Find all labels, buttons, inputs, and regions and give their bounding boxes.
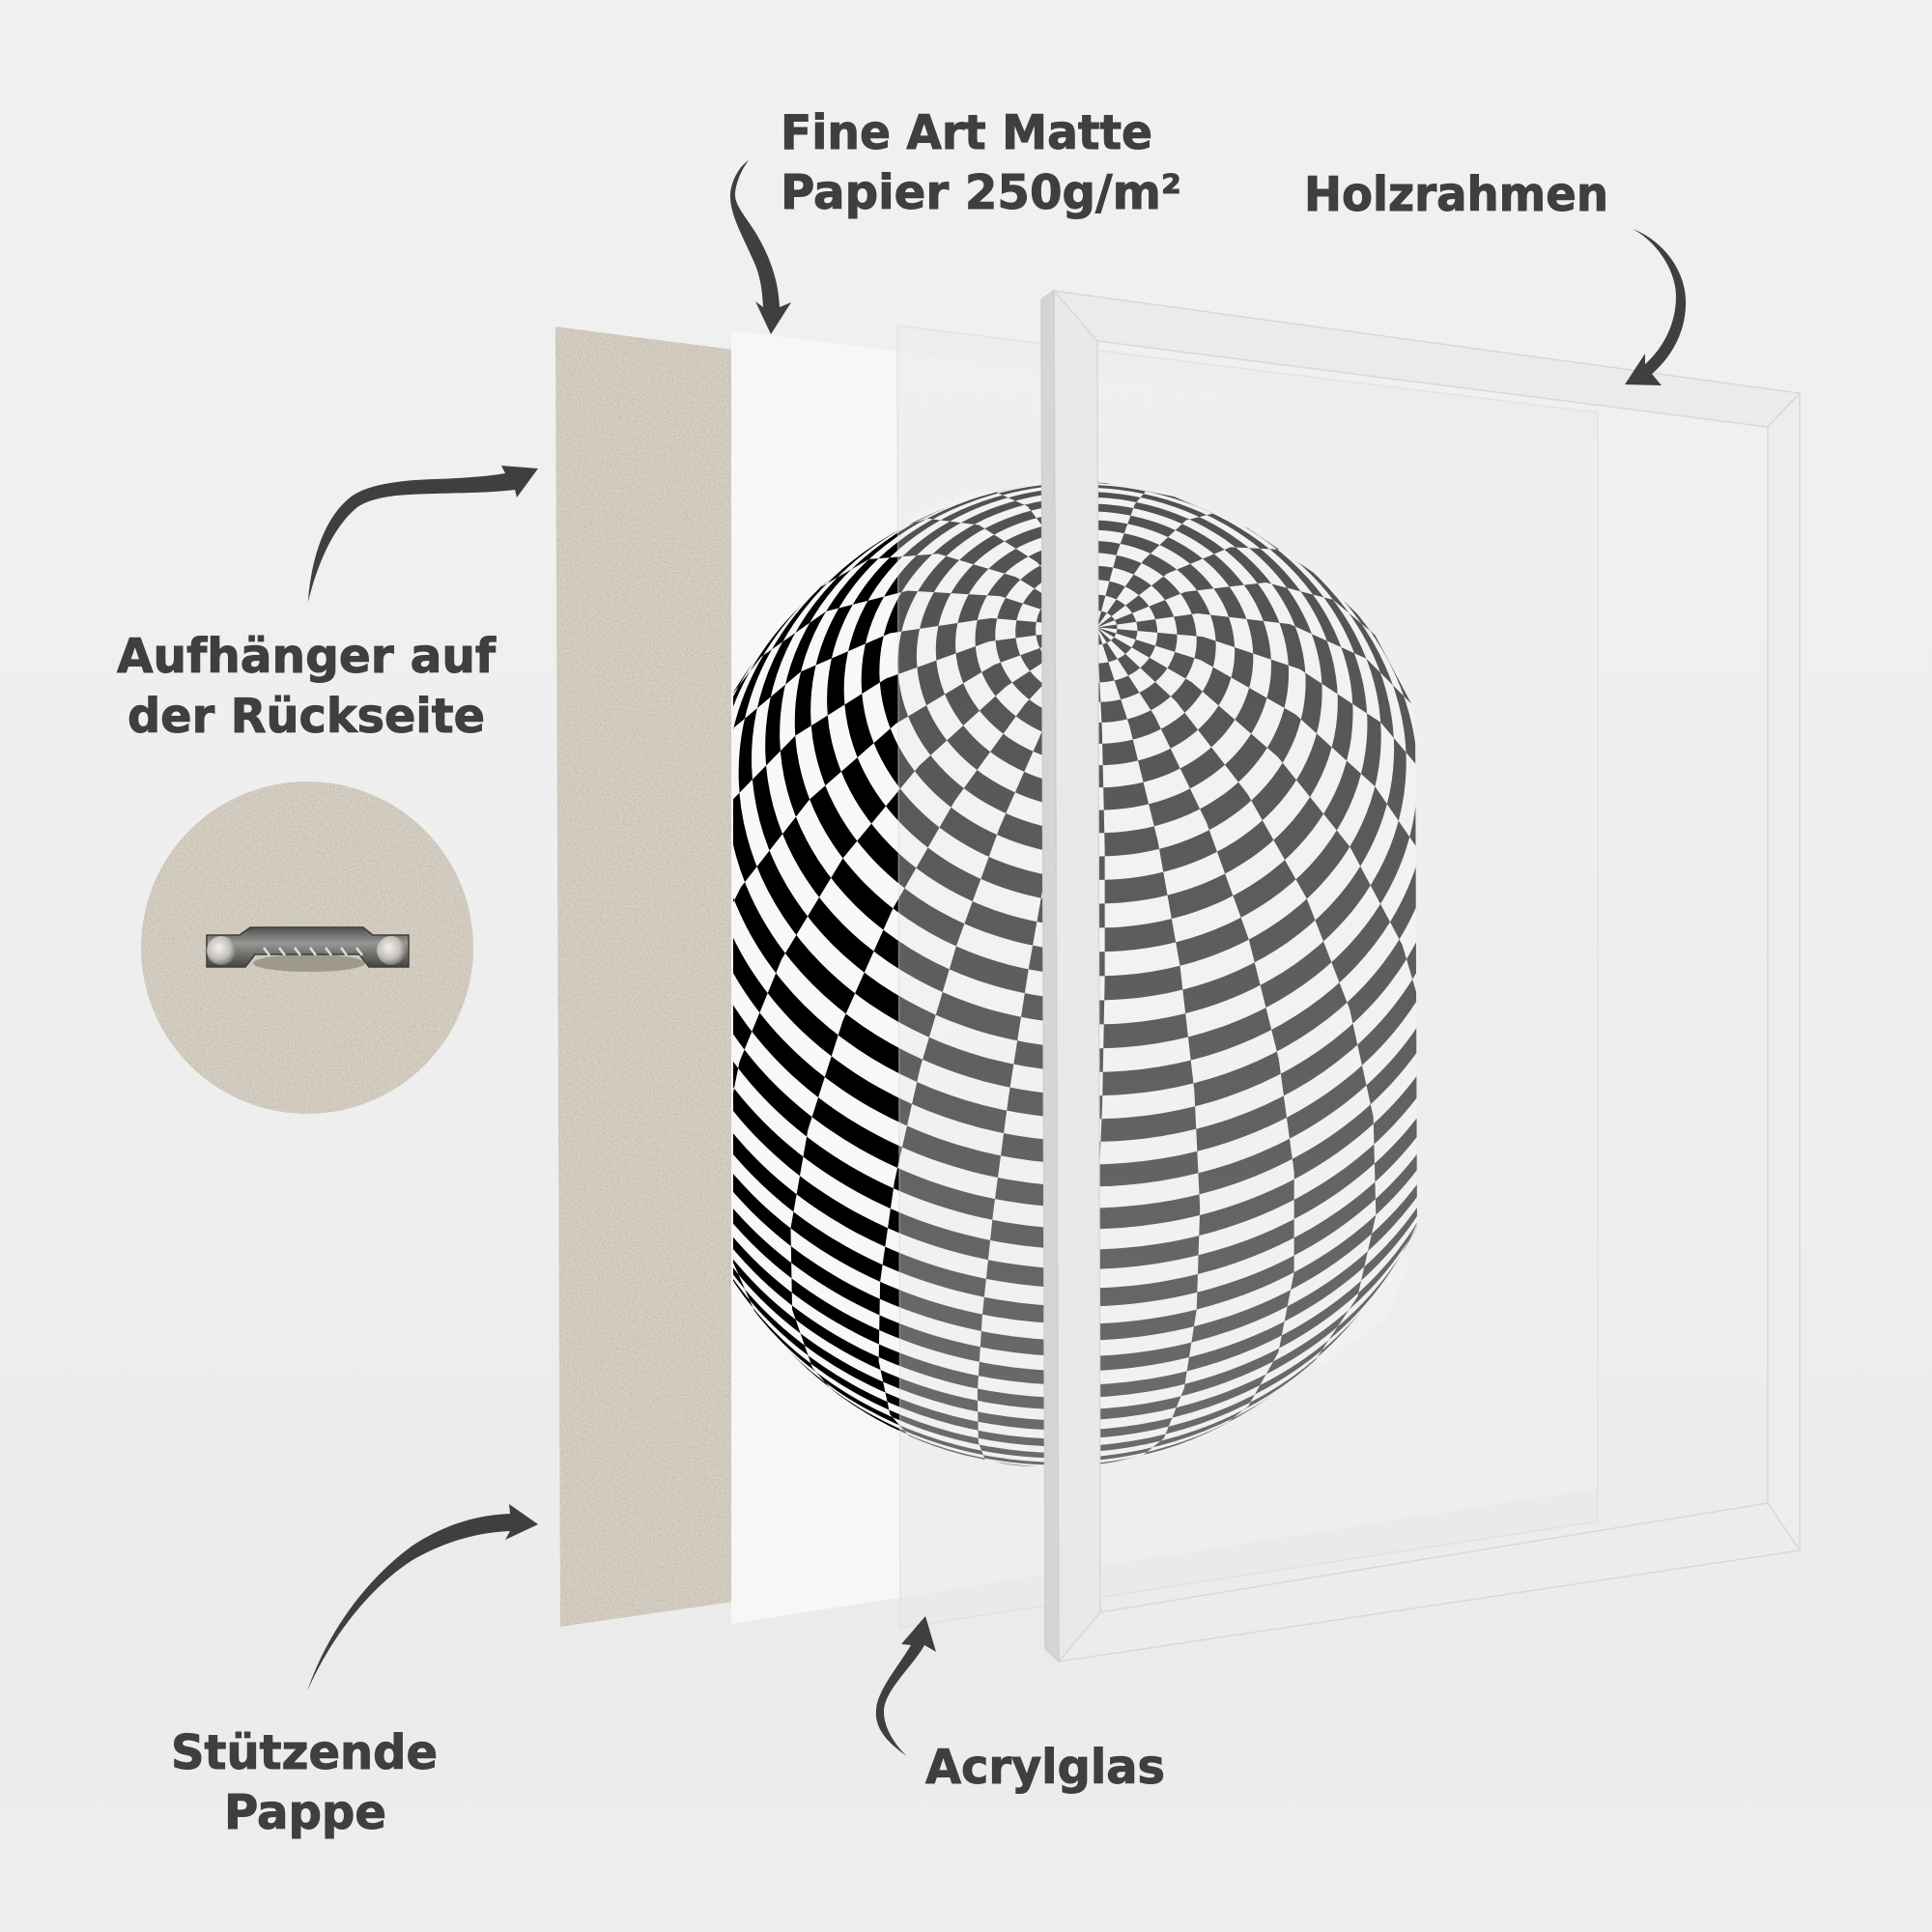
frame top bar: [1054, 291, 1800, 427]
label: paper: Papier 250g/m²: [781, 165, 1181, 220]
arrow: to paper: [730, 160, 791, 334]
panel: wooden frame: [1041, 291, 1800, 1662]
icon: hanger detail on cardboard back: [141, 781, 473, 1114]
panel: supporting cardboard: [555, 327, 733, 1627]
panel: lighter interior beside paper: [1416, 417, 1598, 1517]
label: cardboard: [171, 1725, 438, 1840]
frame side edge: [1041, 291, 1059, 1662]
arrow: to hanger side: [308, 466, 538, 602]
artwork: checkered sphere: [733, 483, 1417, 1466]
label: hanger: der Rückseite: [128, 689, 485, 744]
panel: acrylic glass: [897, 326, 1598, 1628]
frame left bar: [1054, 291, 1100, 1662]
label: cardboard: Stützende: [171, 1725, 438, 1780]
label: frame: Holzrahmen: [1304, 167, 1608, 222]
label: hanger: Aufhänger auf: [117, 629, 497, 684]
panel: fine art paper: [731, 330, 1416, 1624]
frame bottom bar: [1059, 1503, 1800, 1662]
arrow: to frame: [1625, 229, 1686, 385]
label: paper: [781, 105, 1181, 220]
arrow: to acrylic: [876, 1616, 936, 1756]
label: hanger: [117, 629, 497, 744]
label: acrylic: Acrylglas: [925, 1740, 1165, 1795]
frame right bar: [1768, 393, 1800, 1550]
label: paper: Fine Art Matte: [781, 105, 1152, 160]
arrow: to cardboard: [307, 1504, 538, 1691]
label: cardboard: Pappe: [224, 1785, 386, 1840]
